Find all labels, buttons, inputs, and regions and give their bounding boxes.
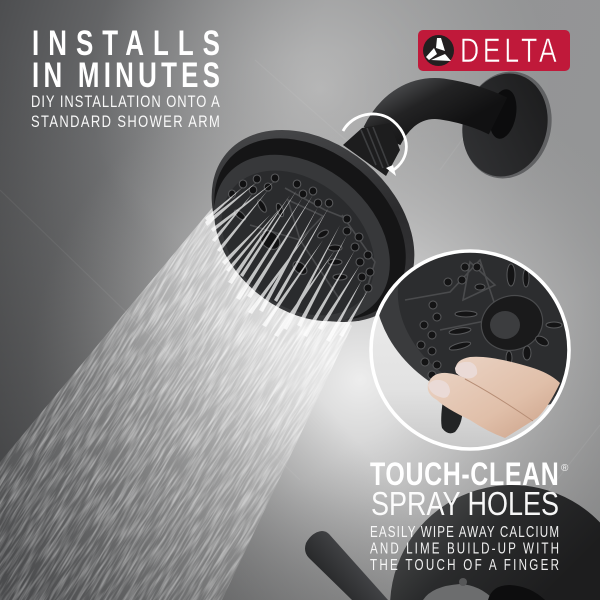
headline: installs in minutes: IN MINUTES bbox=[32, 55, 220, 95]
headline: touch-clean spray holes: ® bbox=[561, 463, 569, 474]
outer rim bbox=[174, 91, 452, 361]
inset backdrop bbox=[372, 252, 568, 448]
faucet handle bbox=[305, 531, 388, 600]
water spray bbox=[0, 208, 352, 600]
logo wordmark: DELTA bbox=[460, 32, 557, 70]
body text: touch-clean description: THE TOUCH OF A FINGER bbox=[370, 556, 559, 573]
inset ring bbox=[371, 251, 569, 449]
rim shadow band bbox=[179, 101, 441, 357]
Delta logo bbox=[418, 30, 570, 71]
shower arm bbox=[382, 99, 498, 136]
water jets bbox=[205, 181, 368, 342]
nozzles bbox=[228, 174, 374, 292]
body text: touch-clean description: AND LIME BUILD-UP WITH bbox=[370, 540, 559, 557]
subhead: installation note bbox=[31, 94, 220, 131]
body text: touch-clean description: EASILY WIPE AWAY CALCIUM bbox=[370, 523, 559, 540]
face ridges bbox=[405, 260, 495, 330]
cleaning lever bbox=[441, 404, 462, 434]
logo badge bbox=[418, 30, 570, 71]
swivel collar bbox=[343, 123, 400, 176]
headline: installs in minutes bbox=[32, 23, 220, 95]
subhead: installation note: STANDARD SHOWER ARM bbox=[31, 114, 220, 131]
subhead: installation note: DIY INSTALLATION ONTO A bbox=[31, 94, 220, 111]
detail inset: touch-clean nozzles bbox=[369, 249, 571, 451]
headline: touch-clean spray holes: SPRAY HOLES bbox=[371, 485, 559, 522]
fingernails bbox=[428, 362, 477, 398]
valve bonnet bbox=[423, 584, 494, 600]
spray haze bbox=[0, 208, 352, 600]
spray streaks bbox=[0, 208, 352, 600]
headline: installs in minutes: INSTALLS bbox=[32, 23, 220, 63]
inset head rim bbox=[379, 284, 556, 405]
inset nozzles bbox=[417, 263, 562, 379]
valve trim plate bbox=[390, 485, 600, 600]
face ridges bbox=[250, 188, 375, 300]
headline: touch-clean spray holes: TOUCH-CLEAN bbox=[370, 457, 559, 493]
wall flange bbox=[451, 62, 563, 188]
inset head face bbox=[398, 253, 567, 396]
rotation arrow bbox=[343, 114, 406, 176]
center rosette bbox=[480, 295, 544, 351]
finger gap bbox=[465, 379, 533, 421]
shower head bbox=[174, 91, 452, 361]
spray face bbox=[181, 121, 423, 355]
fingers bbox=[428, 357, 560, 438]
body text: touch-clean description bbox=[370, 523, 559, 573]
headline: touch-clean spray holes bbox=[370, 457, 569, 522]
logo mark bbox=[423, 35, 454, 66]
